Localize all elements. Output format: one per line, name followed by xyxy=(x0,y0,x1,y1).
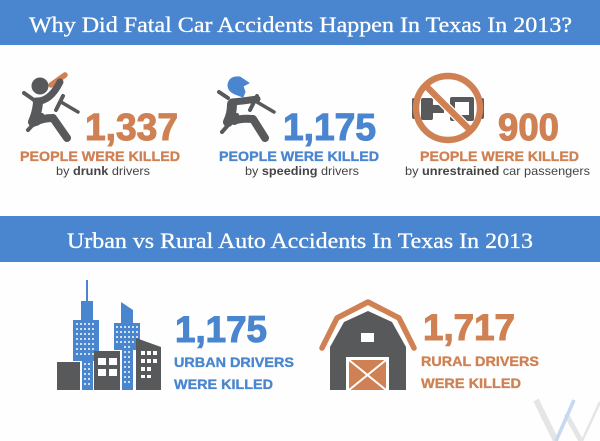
icon: speeding driver xyxy=(219,77,274,138)
stat: 1,717: 1,717 xyxy=(423,307,515,348)
label: RURAL DRIVERS xyxy=(421,353,539,369)
panel: unrestrained passengers xyxy=(405,76,590,178)
label: URBAN DRIVERS xyxy=(174,354,294,370)
icon: no seatbelt xyxy=(412,76,484,140)
stat: 900: 900 xyxy=(498,107,559,149)
stat: 1,175: 1,175 xyxy=(283,107,376,149)
panel: rural drivers xyxy=(322,302,539,391)
caption: by unrestrained car passengers xyxy=(405,164,590,178)
panel: drunk drivers xyxy=(20,75,180,178)
header band: fatal accidents xyxy=(0,0,600,45)
label: WERE KILLED xyxy=(421,375,521,391)
panel: speeding drivers xyxy=(219,77,379,178)
header band: urban vs rural xyxy=(0,216,600,262)
label: PEOPLE WERE KILLED xyxy=(20,148,180,164)
watermark logo xyxy=(536,400,600,441)
caption: by drunk drivers xyxy=(56,164,150,178)
header band: fatal accidents: Why Did Fatal Car Accidents Happen In Texas In 2013? xyxy=(29,12,572,37)
header band: urban vs rural: Urban vs Rural Auto Accidents In Texas In 2013 xyxy=(67,228,533,253)
icon: barn xyxy=(322,302,414,390)
stat: 1,337: 1,337 xyxy=(85,107,178,149)
stat: 1,175: 1,175 xyxy=(175,309,267,350)
icon: city skyline xyxy=(57,280,161,390)
label: WERE KILLED xyxy=(174,376,273,392)
label: PEOPLE WERE KILLED xyxy=(420,148,579,164)
caption: by speeding drivers xyxy=(245,164,359,178)
label: PEOPLE WERE KILLED xyxy=(219,148,379,164)
panel: urban drivers xyxy=(57,280,294,392)
icon: drunk driver xyxy=(24,75,78,138)
